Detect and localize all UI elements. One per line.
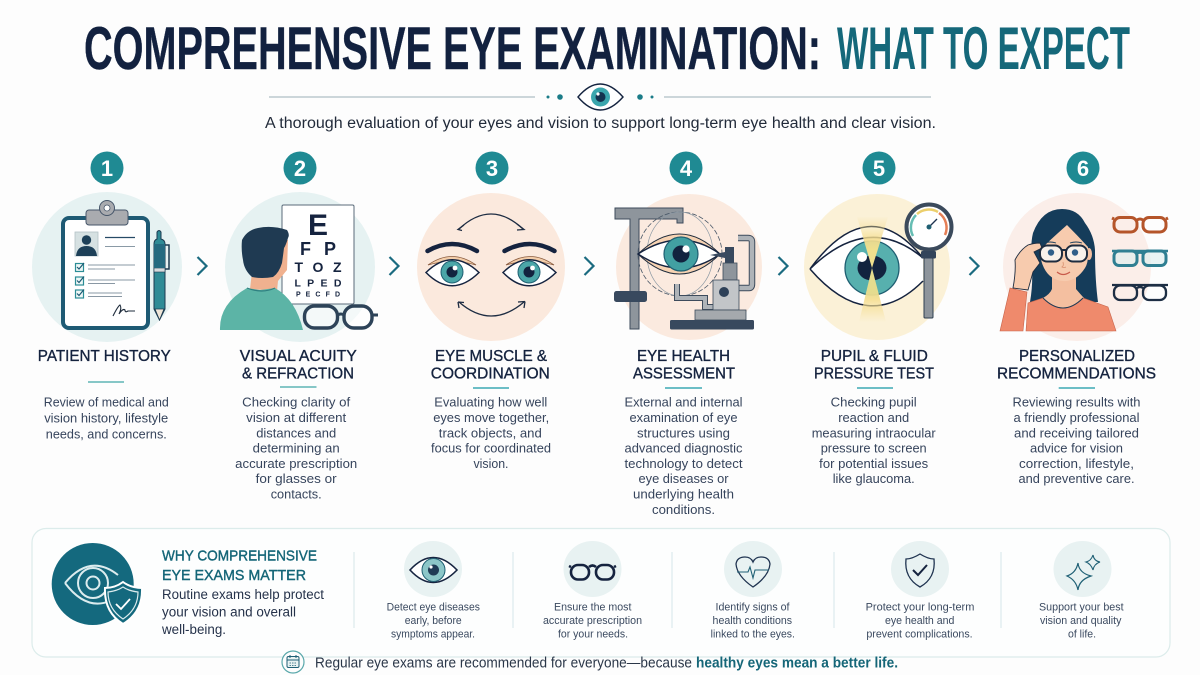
heading: ASSESSMENT [633, 366, 735, 383]
description: for potential issues [819, 456, 929, 471]
icon: woman trying glasses with frame options [1000, 193, 1168, 341]
heading [431, 348, 550, 383]
description: Evaluating how well [434, 395, 547, 410]
arrow [390, 257, 398, 275]
heading: VISUAL ACUITY [240, 348, 357, 365]
title: COMPREHENSIVE EYE EXAMINATION: [84, 15, 821, 82]
panel: why comprehensive eye exams matter [32, 528, 1170, 657]
caption: linked to the eyes. [711, 628, 795, 640]
icon: two eyes with movement arrows [417, 193, 565, 341]
panel heading: WHY COMPREHENSIVE [162, 548, 317, 565]
step 5: pupil and fluid pressure test [804, 152, 952, 486]
icon: patient at eye chart with glasses: P E C F D [296, 292, 340, 298]
description: and receiving tailored [1014, 425, 1139, 440]
caption [543, 602, 642, 640]
description: determining an [253, 441, 340, 456]
icon: patient at eye chart with glasses: E [308, 209, 328, 242]
panel heading [162, 548, 317, 584]
description: conditions. [652, 502, 715, 517]
caption [866, 602, 974, 640]
icon: eye with light cone and pressure gauge [804, 194, 952, 340]
heading [240, 348, 357, 383]
icon: glasses [564, 541, 622, 597]
heading: EYE MUSCLE & [435, 348, 547, 365]
description: technology to detect [624, 456, 743, 471]
description: and preventive care. [1018, 471, 1134, 486]
description [812, 395, 936, 486]
caption [711, 602, 795, 640]
heading: COORDINATION [431, 366, 550, 383]
arrow [584, 257, 594, 275]
heading: & REFRACTION [242, 366, 354, 383]
icon: shield with check [891, 541, 949, 597]
description [624, 395, 743, 517]
subtitle: A thorough evaluation of your eyes and vision to support long-term eye health and clear vision. [265, 115, 936, 132]
heading: PERSONALIZED [1019, 348, 1135, 365]
step 4: eye health assessment [614, 152, 762, 517]
heading [633, 348, 735, 383]
caption: Ensure the most [554, 602, 631, 614]
heading: EYE HEALTH [637, 348, 730, 365]
caption: of life. [1068, 628, 1096, 640]
heading: RECOMMENDATIONS [997, 366, 1156, 383]
caption: prevent complications. [866, 628, 973, 640]
step number 6: 6 [1077, 156, 1089, 181]
description: Checking clarity of [242, 395, 351, 410]
description [44, 395, 169, 442]
caption: symptoms appear. [391, 628, 475, 640]
description: External and internal [624, 395, 743, 410]
step number 5: 5 [873, 156, 885, 181]
icon: eye [404, 541, 462, 597]
arrow [970, 257, 978, 275]
benefit: quality of life [1039, 541, 1124, 640]
benefit: protect eye health [866, 541, 974, 640]
description: underlying health [633, 486, 734, 502]
heading: PUPIL & FLUID [821, 348, 928, 365]
heading [997, 348, 1156, 383]
description: like glaucoma. [833, 471, 915, 486]
description: examination of eye [630, 410, 738, 425]
description: vision at different [246, 410, 347, 425]
description: focus for coordinated [431, 441, 551, 456]
footer: calendar icon [282, 651, 304, 673]
caption: accurate prescription [543, 615, 642, 627]
description: advice for vision [1030, 441, 1123, 456]
caption: Detect eye diseases [387, 602, 480, 614]
benefit: detect eye diseases [387, 541, 480, 640]
description: measuring intraocular [812, 425, 936, 440]
benefit: accurate prescription [543, 541, 642, 640]
panel text [161, 587, 324, 637]
description: Reviewing results with [1012, 395, 1140, 410]
description: structures using [637, 425, 730, 440]
description: accurate prescription [235, 456, 357, 471]
footer message: Regular eye exams are recommended for everyone—because [315, 656, 692, 672]
icon: eye with shield [52, 543, 142, 625]
description: distances and [256, 425, 336, 440]
step 2: visual acuity and refraction [220, 152, 378, 502]
step number 3: 3 [486, 156, 498, 181]
footer message: healthy eyes mean a better life. [696, 656, 898, 672]
description: for glasses or [256, 471, 337, 486]
icon: slit lamp with eye [614, 194, 762, 340]
icon: patient at eye chart with glasses: L P E D [294, 278, 342, 290]
heading [814, 348, 934, 383]
caption: Protect your long-term [866, 602, 974, 614]
caption: Identify signs of [716, 602, 790, 614]
caption [1039, 602, 1124, 640]
icon: sparkles [1054, 541, 1112, 597]
caption: eye health and [885, 615, 954, 627]
description: contacts. [271, 486, 322, 502]
step number 4 [670, 152, 702, 184]
description [431, 395, 551, 471]
icon: clipboard and pen [32, 192, 182, 342]
heading: PRESSURE TEST [814, 366, 934, 383]
heading: PATIENT HISTORY [38, 348, 171, 365]
description: eyes move together, [433, 410, 549, 425]
description [1012, 395, 1140, 486]
step number 4: 4 [680, 156, 693, 181]
description: vision. [474, 456, 508, 471]
description: vision history, lifestyle [44, 410, 168, 426]
step number 1 [90, 152, 124, 184]
step number 1: 1 [101, 156, 113, 181]
description: correction, lifestyle, [1019, 456, 1134, 471]
description [235, 395, 357, 502]
benefit: health conditions [711, 541, 795, 640]
caption [387, 602, 480, 640]
caption: vision and quality [1040, 615, 1122, 627]
description: reaction and [838, 410, 909, 425]
panel text: well-being. [161, 622, 226, 637]
arrow [778, 257, 788, 275]
step number 2: 2 [294, 156, 306, 181]
description: eye diseases or [638, 471, 729, 486]
description: Checking pupil [831, 395, 917, 410]
icon: patient at eye chart with glasses [220, 192, 378, 342]
step number 6 [1066, 152, 1100, 184]
caption: Support your best [1039, 602, 1124, 614]
caption: health conditions [713, 615, 793, 627]
icon: heart with pulse [724, 541, 782, 597]
step 3: eye muscle and coordination [417, 152, 565, 471]
step number 3 [476, 152, 508, 184]
step 1: patient history [32, 152, 182, 442]
description: needs, and concerns. [46, 426, 167, 442]
description: a friendly professional [1014, 410, 1140, 425]
title ornament: eye with lines and dots [269, 84, 931, 110]
icon: patient at eye chart with glasses: T O Z [294, 259, 342, 275]
step 6: personalized recommendations [997, 152, 1168, 486]
panel text: your vision and overall [162, 605, 296, 620]
footer message [315, 656, 898, 672]
step number 2 [284, 152, 316, 184]
icon: patient at eye chart with glasses: F P [300, 239, 336, 259]
description: Review of medical and [44, 395, 169, 410]
panel text: Routine exams help protect [162, 587, 324, 602]
step number 5 [862, 152, 896, 184]
panel heading: EYE EXAMS MATTER [162, 567, 306, 584]
arrow [198, 257, 206, 275]
description: track objects, and [439, 425, 542, 440]
caption: for your needs. [558, 628, 628, 640]
description: advanced diagnostic [624, 441, 743, 456]
caption: early, before [405, 615, 462, 627]
description: pressure to screen [821, 441, 927, 456]
